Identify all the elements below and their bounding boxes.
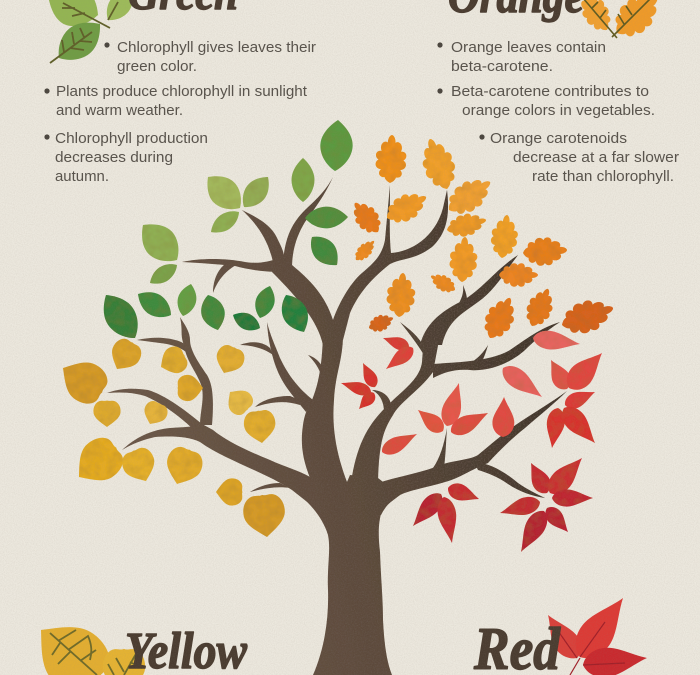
text block: orange facts: Orange leaves contain [451,39,606,56]
text block: green facts: decreases during [55,149,173,166]
text block: orange facts: orange colors in vegetables. [462,102,655,119]
text block: orange facts: decrease at a far slower [513,149,679,166]
text block: green facts: Chlorophyll gives leaves their [117,39,316,56]
orange leaves on tree [346,134,618,344]
green leaves on tree [94,119,354,346]
text block: green facts: Chlorophyll production [55,130,208,147]
text block: orange facts: rate than chlorophyll. [532,168,674,185]
text block: orange facts: Orange carotenoids [490,130,627,147]
tree [107,177,567,675]
text block: orange facts [437,39,679,185]
text block: green facts: green color. [117,58,197,75]
icon: yellow leaves [21,606,145,675]
text block: green facts: Plants produce chlorophyll in sunlight [56,83,308,100]
icon: orange leaves [573,0,668,46]
icon: green leaves [40,0,140,70]
text block: orange facts: Beta-carotene contributes to [451,83,649,100]
text block: green facts [44,39,316,185]
yellow leaves on tree [52,335,288,540]
text block: orange facts: beta-carotene. [451,58,553,75]
text block: green facts: and warm weather. [56,102,183,119]
text block: green facts: autumn. [55,168,109,185]
icon: red leaves [537,588,649,675]
red leaves on tree [339,329,611,557]
